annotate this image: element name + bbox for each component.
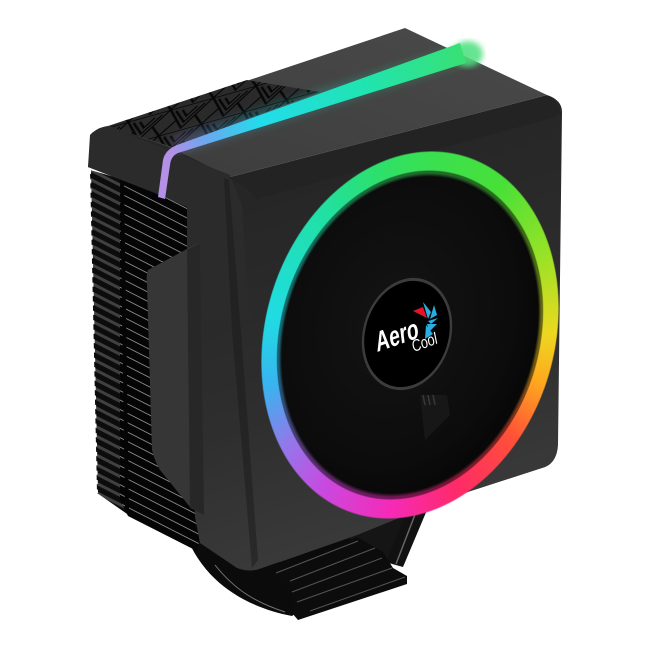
side bracket — [147, 243, 204, 515]
shroud side and front — [88, 95, 562, 570]
bevel — [228, 96, 560, 200]
rgb top strip — [158, 43, 466, 199]
heat pipes — [186, 510, 427, 616]
mounting base — [275, 537, 407, 620]
logo text — [374, 313, 441, 359]
logo text: Cool — [409, 330, 441, 356]
front panel — [257, 117, 558, 562]
textured top vent — [108, 80, 320, 147]
fan opening — [270, 138, 550, 532]
rgb strip end glow — [453, 41, 483, 67]
rear top cap — [88, 126, 250, 320]
rgb ring — [261, 151, 559, 519]
rgb ring glow — [261, 151, 559, 519]
logo text: Aero — [374, 313, 420, 359]
side shading — [224, 178, 258, 568]
top face — [100, 28, 547, 177]
hub — [363, 272, 451, 396]
rgb top strip glow — [174, 52, 470, 146]
logo icon — [413, 302, 438, 339]
heatsink fins — [88, 170, 204, 551]
motor bracket — [420, 395, 450, 440]
